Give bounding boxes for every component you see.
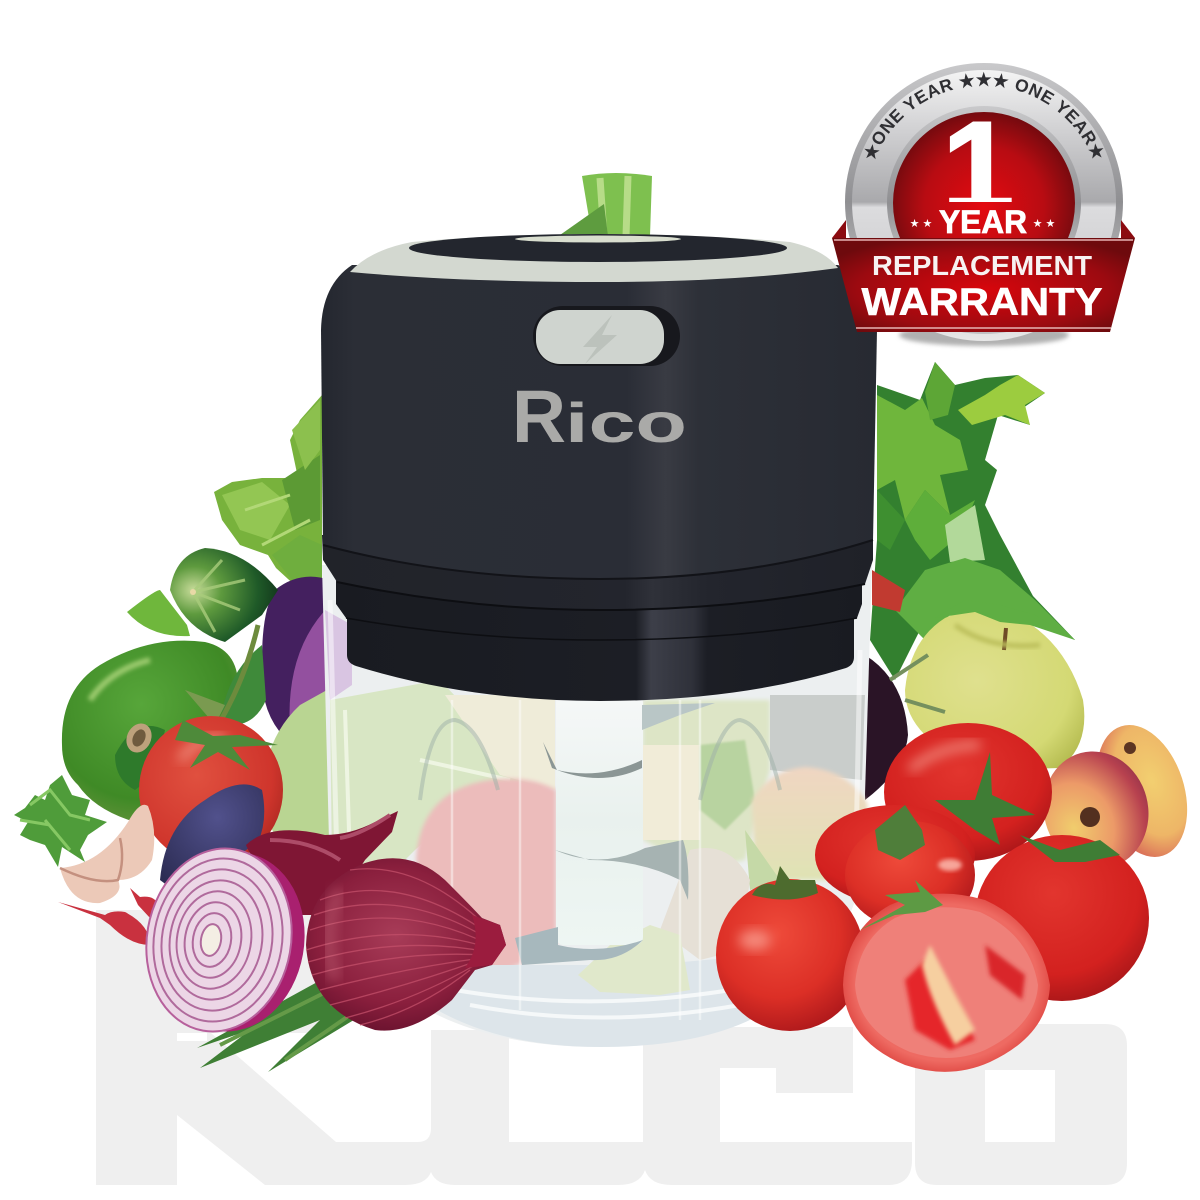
left tomato: [139, 716, 283, 864]
pale cabbage through jar: [330, 680, 545, 870]
eggplant: [865, 655, 908, 800]
vegetables behind left: [14, 395, 350, 945]
red centre: [893, 112, 1075, 294]
pale cauliflower: [445, 695, 555, 790]
green pepper: [62, 641, 238, 822]
ribbon folds: [832, 220, 1135, 240]
front middle tomato: [845, 821, 975, 929]
warranty badge: [832, 63, 1135, 348]
onions and leaves: [132, 811, 506, 1072]
central shaft: [556, 695, 643, 945]
celery stalk: [560, 173, 652, 236]
half onion face: [132, 837, 306, 1043]
small stars left: ★ ★: [910, 218, 933, 230]
cucumber: [170, 548, 278, 642]
blade upper right: [642, 703, 715, 730]
blade bottom: [515, 927, 643, 965]
power button slot: [533, 306, 680, 366]
jar glass: [322, 565, 872, 1047]
big tomato back: [884, 723, 1052, 861]
third tier: [336, 570, 862, 640]
green leaves: [197, 975, 362, 1072]
half tomato: [843, 894, 1050, 1072]
parsley sprig: [14, 775, 107, 867]
warranty: WARRANTY: [862, 281, 1102, 324]
ring text: ★ONE YEAR ★★★ ONE YEAR★: [864, 72, 1104, 160]
pale apple: [416, 779, 556, 972]
tomatoes and peaches: [716, 713, 1200, 1072]
big onion: [306, 858, 506, 1031]
second tier: [322, 530, 873, 610]
power button: [536, 310, 664, 364]
tomato calyx: [175, 720, 278, 770]
badge shadow: [899, 324, 1069, 346]
silver ring: [845, 63, 1123, 341]
jar base: [395, 955, 800, 1047]
lid button: [515, 236, 681, 242]
peach back: [1081, 713, 1200, 869]
garlic: [60, 805, 154, 903]
small stars right: ★ ★: [1033, 218, 1056, 230]
blade top: [543, 742, 642, 778]
numeral: 1: [942, 94, 1014, 240]
replacement: REPLACEMENT: [872, 250, 1092, 281]
top ring: [350, 234, 838, 282]
half tomato stem: [860, 880, 943, 930]
parsley: [870, 362, 1075, 680]
main body: [321, 265, 877, 579]
herb stems: [890, 655, 945, 712]
peach front: [1031, 740, 1161, 880]
watermark: Rico letters: [96, 910, 1127, 1185]
plum: [160, 784, 264, 895]
blade middle: [555, 840, 688, 900]
back middle tomato: [815, 805, 975, 905]
chili: [58, 902, 150, 945]
right side through jar: [643, 700, 770, 870]
right tomato: [975, 835, 1149, 1001]
calyx big tomato: [935, 752, 1035, 845]
brand logo: R: [512, 375, 566, 458]
apple: [905, 608, 1084, 770]
lower collar: [347, 600, 854, 701]
back onion: [246, 811, 398, 915]
brand logo: ico: [565, 391, 687, 454]
leaf behind tomato: [222, 645, 266, 725]
glass ribs: [452, 700, 700, 1020]
pale purple cabbage through jar: [325, 610, 352, 700]
pale cabbage: [263, 680, 345, 860]
ribbon: [832, 238, 1135, 332]
year label: YEAR: [939, 204, 1027, 240]
lettuce: [214, 395, 322, 590]
basil leaf: [127, 590, 190, 636]
top dark inset: [409, 234, 787, 262]
chunks: [578, 925, 690, 995]
left front tomato: [716, 879, 864, 1031]
inner bevel: [887, 106, 1081, 300]
vegetables behind right: [865, 362, 1084, 800]
chopper head: [321, 234, 877, 701]
jar: [322, 565, 872, 1047]
lightning icon: [583, 315, 617, 364]
half onion skin: [145, 841, 319, 1043]
mint over apple: [935, 600, 1075, 640]
red cabbage: [261, 577, 330, 740]
